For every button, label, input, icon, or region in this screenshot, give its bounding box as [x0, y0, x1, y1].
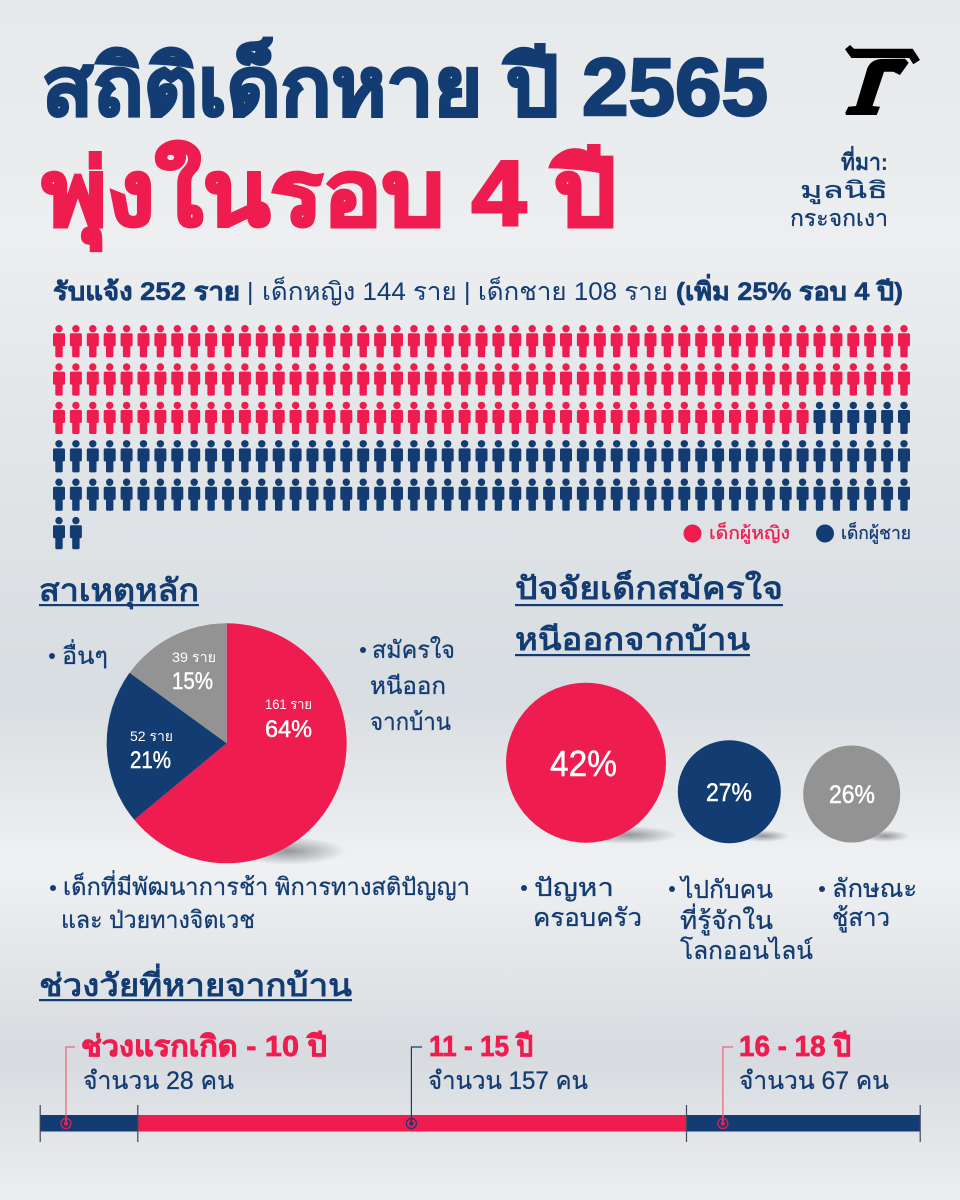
- label: online acquaintance: โลกออนไลน์: [680, 936, 813, 965]
- pictogram: missing children count: [53, 325, 910, 549]
- summary line: [53, 274, 903, 306]
- title: [42, 37, 768, 251]
- source credit: [790, 145, 888, 231]
- timeline marker: 11 to 15 years: [406, 1031, 588, 1128]
- timeline marker: 16 to 18 years: 16 - 18 ปี: [739, 1031, 851, 1063]
- label: online acquaintance: ที่รู้จักใน: [680, 903, 773, 936]
- heading: main causes: สาเหตุหลัก: [39, 573, 199, 610]
- label: voluntarily left home: หนีออก: [370, 673, 446, 700]
- bubble: 42%: [506, 683, 678, 844]
- pie labels: 39 ราย: [172, 649, 216, 665]
- summary line: เด็กหญิง 144 ราย | เด็กชาย 108 ราย: [262, 276, 668, 306]
- label: family problems: ครอบครัว: [533, 904, 642, 932]
- timeline marker: 11 to 15 years: 11 - 15 ปี: [429, 1031, 533, 1063]
- pie labels: 21%: [130, 747, 171, 774]
- timeline marker: 11 to 15 years: จำนวน 157 คน: [428, 1067, 588, 1095]
- bubble: 27%: 27%: [706, 779, 752, 807]
- pie labels: 64%: [265, 716, 312, 743]
- bubble: 42%: 42%: [550, 743, 617, 784]
- label: online acquaintance: ไปกับคน: [679, 875, 773, 904]
- pie labels: [130, 649, 312, 774]
- timeline bar: [40, 1105, 921, 1142]
- bubble: 26%: 26%: [829, 781, 875, 809]
- pie chart: main causes: [107, 623, 347, 865]
- label: voluntarily left home: [360, 636, 455, 736]
- timeline marker: 16 to 18 years: จำนวน 67 คน: [739, 1067, 889, 1095]
- label: developmental disabilities: [50, 870, 470, 934]
- label: romantic: [819, 875, 917, 933]
- summary line: |: [247, 278, 254, 306]
- pie labels: 52 ราย: [130, 728, 173, 744]
- girls icons: [53, 325, 910, 434]
- heading: voluntary factors: ปัจจัยเด็กสมัครใจ: [515, 569, 783, 606]
- timeline marker: 16 to 18 years: [718, 1031, 889, 1128]
- title: สถิติเด็กหาย ปี 2565: [42, 37, 768, 133]
- label: online acquaintance: [669, 875, 813, 965]
- heading: voluntary factors: [515, 569, 783, 657]
- label: voluntarily left home: จากบ้าน: [370, 709, 451, 736]
- label: developmental disabilities: เด็กที่มีพัฒนาการช้า พิการทางสติปัญญา: [63, 870, 470, 901]
- boys icons: [53, 402, 910, 549]
- label: voluntarily left home: สมัครใจ: [372, 636, 455, 664]
- source credit: ที่มา:: [841, 145, 888, 175]
- heading: age range: ช่วงวัยที่หายจากบ้าน: [39, 963, 352, 1003]
- title: พุ่งในรอบ 4 ปี: [42, 141, 616, 251]
- label: others: [49, 639, 108, 670]
- label: developmental disabilities: และ ป่วยทางจิตเวช: [61, 907, 255, 934]
- bubble: 26%: [803, 746, 909, 842]
- summary line: รับแจ้ง 252 ราย: [53, 278, 240, 306]
- pie labels: 161 ราย: [265, 696, 312, 712]
- label: romantic: ลักษณะ: [832, 875, 917, 903]
- icon: logo: [845, 45, 920, 115]
- source credit: กระจกเงา: [790, 205, 888, 231]
- legend: [684, 521, 911, 544]
- label: others: อื่นๆ: [62, 639, 108, 670]
- pie labels: 15%: [172, 668, 213, 695]
- source credit: มูลนิธิ: [800, 177, 888, 204]
- bubble: 27%: [678, 740, 789, 843]
- legend: เด็กผู้ชาย: [841, 521, 911, 544]
- label: family problems: ปัญหา: [534, 874, 614, 902]
- timeline marker: birth to 10 years: ช่วงแรกเกิด - 10 ปี: [81, 1031, 327, 1063]
- legend: เด็กผู้หญิง: [709, 521, 790, 544]
- timeline marker: birth to 10 years: จำนวน 28 คน: [83, 1067, 234, 1095]
- label: family problems: [521, 874, 642, 932]
- label: romantic: ชู้สาว: [832, 904, 890, 933]
- heading: voluntary factors: หนีออกจากบ้าน: [515, 622, 750, 657]
- timeline marker: birth to 10 years: [61, 1031, 327, 1128]
- summary line: (เพิ่ม 25% รอบ 4 ปี): [676, 274, 903, 306]
